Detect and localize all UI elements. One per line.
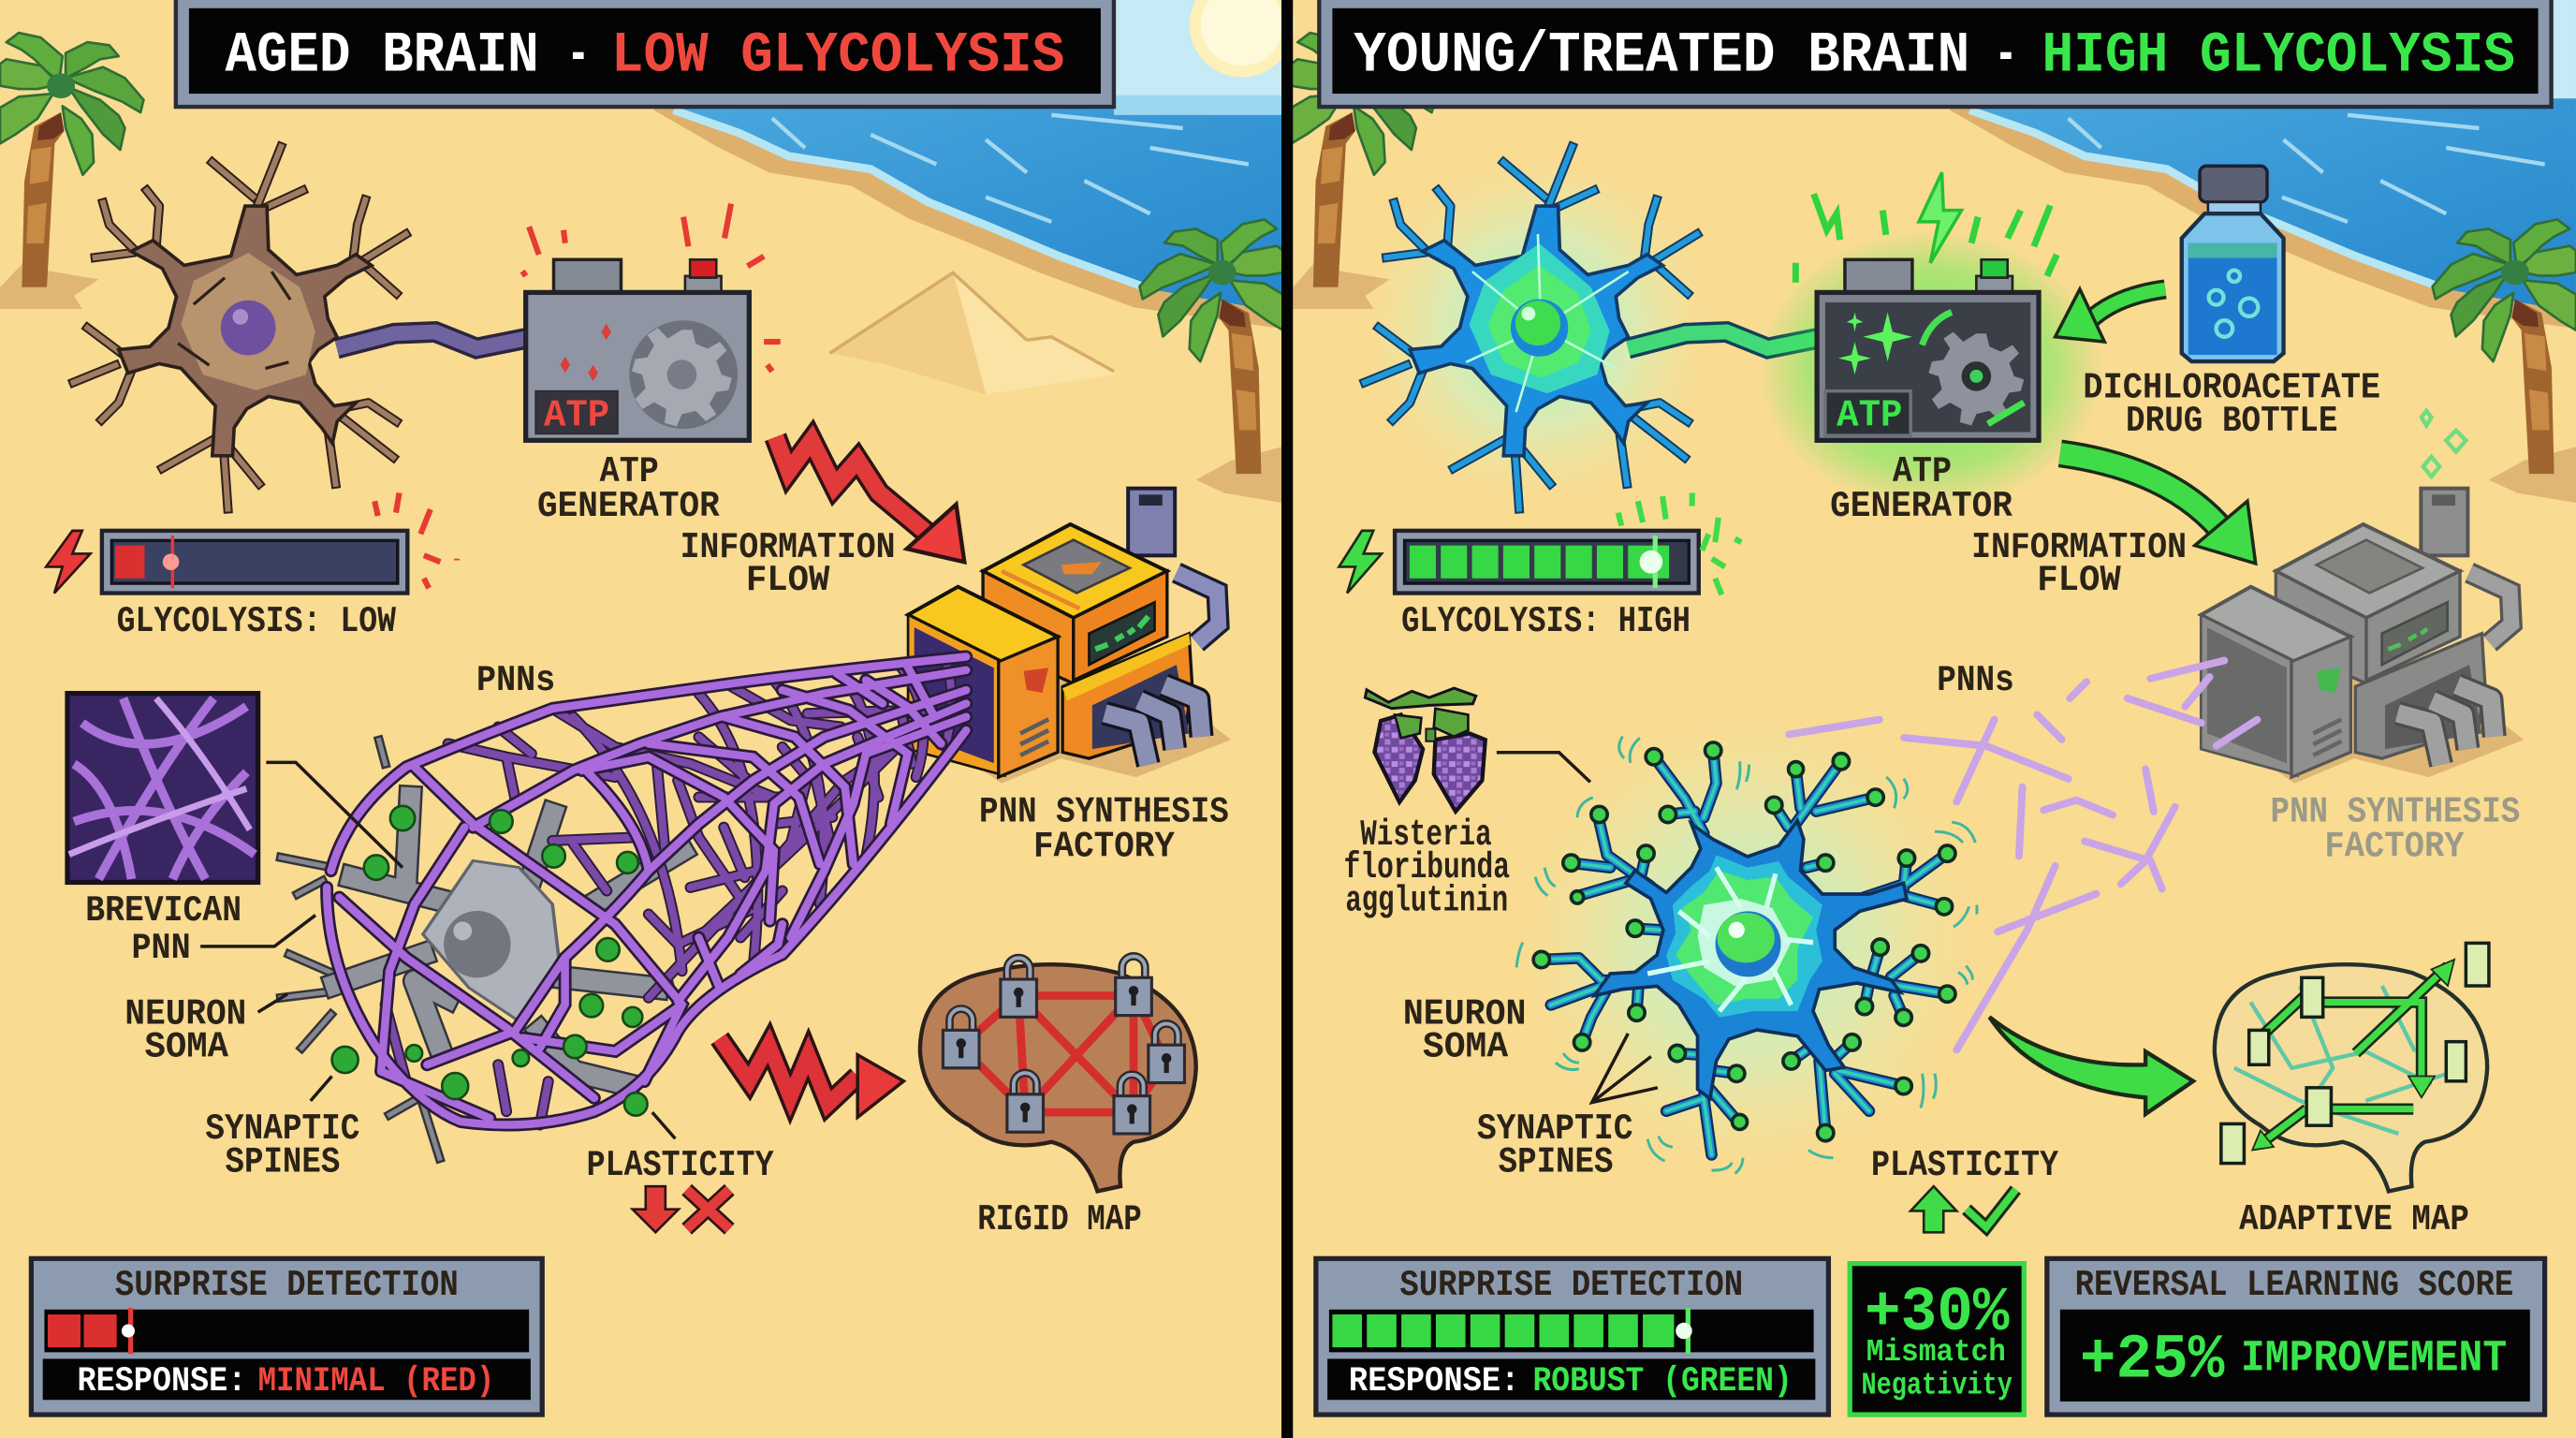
leader lines aged [200,762,675,1138]
header: young [1319,0,2552,107]
ATP generator label: ATP [600,451,659,492]
nucleus [1716,911,1781,976]
information flow label [681,527,896,601]
nucleus [221,301,275,355]
sky right [2530,0,2576,105]
dissolving PNN fragments [1789,661,2257,1049]
green bubbles [2422,411,2466,477]
adaptive brain map [2215,943,2489,1191]
neuron soma label: SOMA [145,1026,229,1067]
plasticity label right: PLASTICITY [1871,1145,2059,1186]
leader lines young [1497,753,1658,1103]
neuron soma label: NEURON [124,993,246,1034]
PNN factory label faded [2271,792,2520,867]
net [327,657,966,1125]
panel: reversal learning score [2047,1258,2545,1415]
synaptic spines label right: SYNAPTIC [1477,1108,1633,1150]
ATP generator label right: ATP [1893,451,1952,492]
drug bottle label: DRUG BOTTLE [2126,401,2337,442]
panel: surprise detection young: ROBUST (GREEN) [1532,1362,1793,1401]
sand dune [829,272,1117,394]
information flow label: INFORMATION [681,527,896,568]
red sparks: bar [374,493,457,588]
axon [337,332,526,348]
PNN factory: colored [908,489,1231,784]
green arrow: adaptive map [1989,1017,2193,1114]
spine tips [1533,742,1955,1141]
drug bottle label: DICHLOROACETATE [2083,368,2380,409]
green sparks: bar [1618,493,1741,594]
title dash: - [567,23,590,88]
nucleus [1511,299,1568,357]
inset: brevican PNN [67,694,258,882]
neuron: glowing lower with spines [1516,716,1977,1173]
wet sand shoreline [654,98,1281,329]
panel: surprise detection aged: SURPRISE DETECTION [115,1265,459,1306]
information flow label right [1971,527,2187,601]
drug bottle label [2083,368,2380,442]
palm shadow right [1196,447,1281,503]
neuron soma label [124,993,246,1067]
title red: LOW GLYCOLYSIS [611,23,1064,88]
neuron soma label right: SOMA [1423,1026,1509,1067]
synaptic spine dots [332,806,648,1116]
palm: right [1139,219,1283,474]
synaptic spines label right [1477,1108,1633,1182]
icon: check mark [1967,1190,2015,1227]
synaptic spines label [205,1108,359,1182]
title green: HIGH GLYCOLYSIS [2042,23,2515,88]
panel: reversal learning score: IMPROVEMENT [2241,1335,2507,1385]
palm shadow panel right [2489,447,2576,503]
palm: panel right [2433,219,2576,474]
ATP generator label [537,451,721,527]
title dash: - [1995,23,2017,88]
Wisteria label: floribunda [1344,847,1510,888]
red sparks: generator [522,204,781,372]
synaptic spines label: SPINES [225,1141,340,1182]
glycolysis bar: low [102,531,407,594]
palm: left [0,33,143,287]
icon: plasticity up arrow [1910,1186,1956,1232]
title white: YOUNG/TREATED BRAIN [1354,23,1969,88]
glycolysis high label: GLYCOLYSIS: HIGH [1401,601,1690,642]
panel: surprise detection aged: RESPONSE: [78,1362,246,1401]
neuron soma label right: NEURON [1403,993,1526,1034]
panel: mismatch negativity stat: Negativity [1862,1368,2012,1403]
rigid map label: RIGID MAP [977,1199,1142,1240]
information flow label: FLOW [746,560,830,601]
panel: reversal learning score: +25% [2080,1326,2225,1397]
icon: red cross inner [687,1190,729,1229]
palm shadow left [0,263,98,309]
icon: red bolt [46,531,91,594]
palm shadow panel left [1293,263,1390,309]
ATP generator label: GENERATOR [537,486,721,527]
sky and sun [1101,0,1295,105]
neuron: glowing upper [1365,147,1817,509]
PNN factory label: PNN SYNTHESIS [979,792,1229,833]
panel: surprise detection young: RESPONSE: [1349,1362,1519,1401]
neuron: aged [73,147,526,509]
plasticity label: PLASTICITY [587,1145,774,1186]
PNN factory: inactive grey [2201,489,2524,784]
glycolysis bar: high [1395,531,1699,594]
sea right [1969,98,2576,312]
axon [1628,332,1817,348]
wet sand shoreline right [1950,98,2576,329]
panel: mismatch negativity stat: Mismatch [1866,1335,2006,1371]
icon: plasticity down arrow [633,1186,679,1232]
ATP generator label right: GENERATOR [1830,486,2013,527]
rigid brain map [920,956,1196,1191]
title white: AGED BRAIN [225,23,539,88]
panel: reversal learning score: REVERSAL LEARNING SCORE [2075,1265,2513,1306]
PNN factory label [979,792,1229,867]
red zigzag arrow: information flow [775,437,964,562]
information flow label right: FLOW [2037,560,2122,601]
panel: surprise detection aged: MINIMAL (RED) [258,1362,494,1401]
panel: surprise detection young [1316,1258,1828,1415]
icon: red cross [687,1190,729,1229]
information flow label right: INFORMATION [1971,527,2187,568]
icon: green bolt [1339,531,1382,594]
ATP screen label: ATP [1837,395,1902,438]
red zigzag arrow: rigid map [720,1038,903,1117]
synaptic spines label right: SPINES [1499,1141,1613,1182]
icon: check mark inner [1967,1190,2015,1227]
synaptic spines label: SYNAPTIC [205,1108,359,1150]
adaptive map label: ADAPTIVE MAP [2239,1199,2469,1240]
vibration arcs [1516,737,1977,1173]
icon: wisteria flowers [1365,688,1486,812]
PNNs label: PNNs [476,660,555,701]
panel: aged brain [0,0,1295,1415]
Wisteria label: agglutinin [1345,880,1508,921]
sea [674,95,1281,312]
green sparks: generator [1795,172,2056,283]
brevican label [85,890,242,969]
panel: mismatch negativity stat [1850,1264,2024,1415]
nucleus [444,911,511,977]
PNN factory label faded: FACTORY [2324,826,2465,867]
neuron soma label right [1403,993,1526,1067]
panel: surprise detection aged [31,1258,542,1415]
grey dendrites [281,741,682,1158]
Wisteria label [1344,814,1510,921]
ATP generator: glowing [1758,230,2102,509]
icon: drug bottle [2182,166,2284,361]
panel divider [1281,0,1293,1438]
green arrow: information flow [2060,453,2256,564]
brevican label: BREVICAN [85,890,242,932]
brevican label: PNN [131,928,191,969]
glycolysis low label: GLYCOLYSIS: LOW [117,601,397,642]
soma [423,860,559,1021]
palm: panel left [1292,33,1435,287]
neuron caged in PNN net [281,657,966,1158]
PNN factory label: FACTORY [1033,826,1176,867]
ATP generator label right [1830,451,2013,527]
ATP generator: aged [526,259,749,440]
PNN factory label faded: PNN SYNTHESIS [2271,792,2520,833]
ATP screen label: ATP [544,395,609,438]
panel: young/treated brain [1292,0,2576,1415]
panel: surprise detection young: SURPRISE DETECTION [1399,1265,1743,1306]
Wisteria label: Wisteria [1360,814,1492,856]
green arrow: bottle to generator [2056,289,2165,342]
header: aged [176,0,1114,107]
PNNs label right: PNNs [1937,660,2014,701]
panel: mismatch negativity stat: +30% [1865,1278,2010,1349]
